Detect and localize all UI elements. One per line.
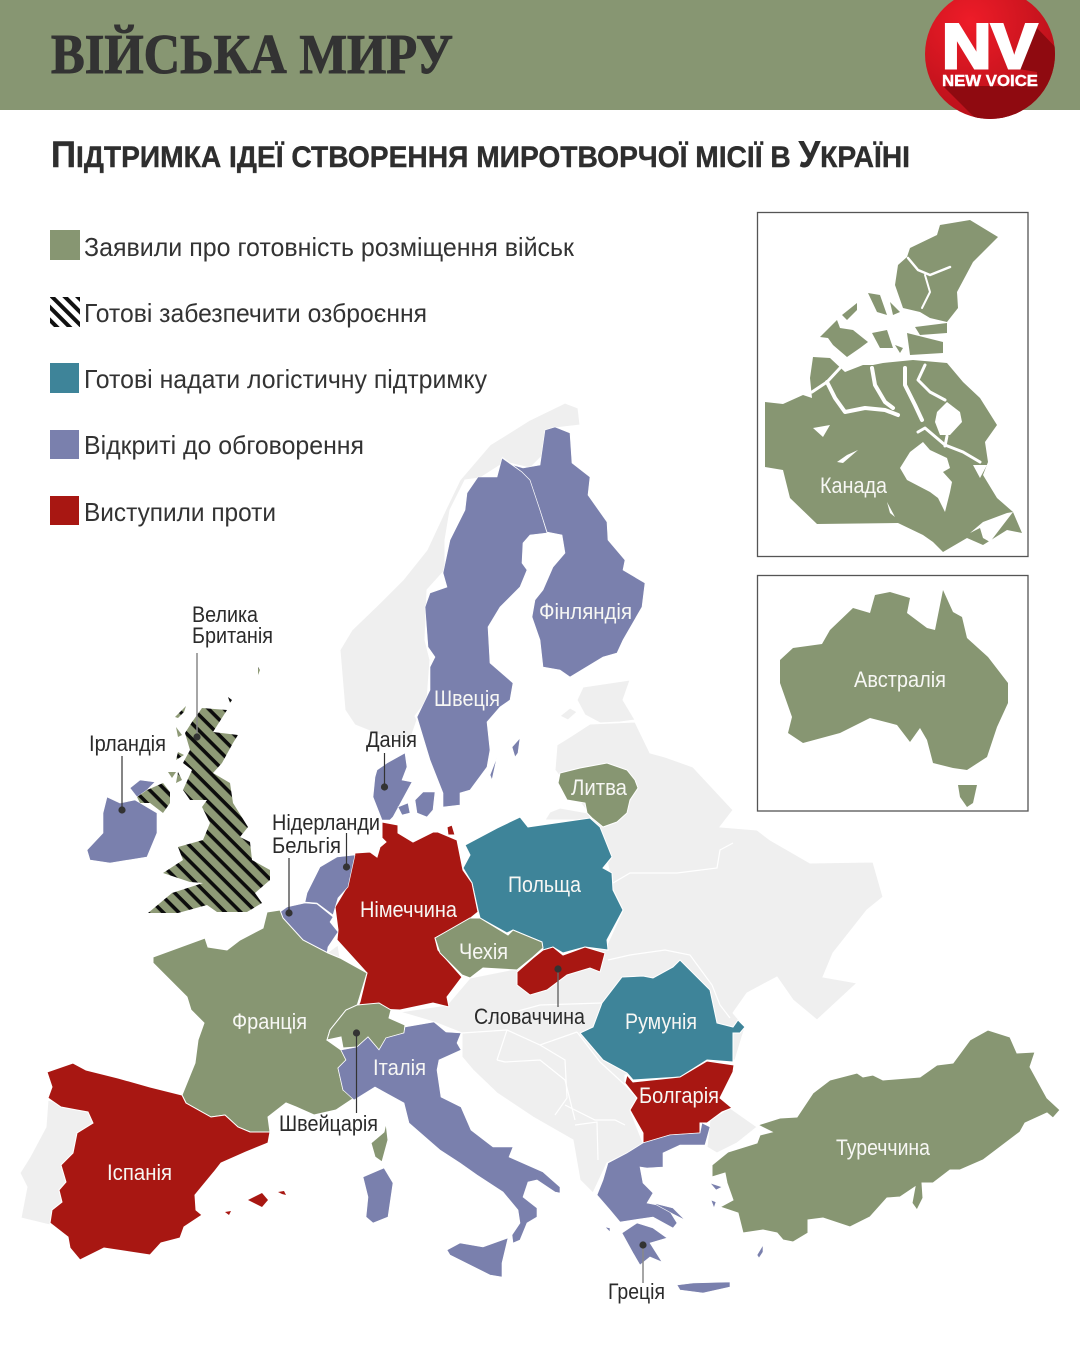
- callout: Switzerland: [279, 1029, 378, 1136]
- callout: Great Britain: Британія: [192, 623, 273, 648]
- country labels on map: Туреччина: [836, 1135, 931, 1160]
- neutral countries (grey): [20, 403, 883, 1225]
- Spain: [47, 1063, 286, 1260]
- logo: NV New Voice: [925, 0, 1055, 119]
- country labels on map: Італія: [373, 1055, 426, 1080]
- callout: Belgium: [272, 833, 341, 917]
- callout: Greece: Греція: [608, 1279, 665, 1304]
- header band: [0, 0, 1080, 110]
- country labels on map: Болгарія: [639, 1083, 719, 1108]
- callout: Slovakia: [474, 965, 586, 1029]
- Ireland: [87, 780, 157, 863]
- Italy: [338, 1022, 560, 1277]
- callout: Slovakia: Словаччина: [474, 1004, 586, 1029]
- legend item: opposed: Виступили проти: [84, 497, 276, 527]
- legend item: weapons: Готові забезпечити озброєння: [84, 298, 427, 328]
- Switzerland: [327, 1003, 405, 1050]
- Turkey: [712, 1030, 1060, 1242]
- Belgium: [280, 903, 338, 953]
- country labels on map: [107, 599, 931, 1185]
- country labels on map: Фінляндія: [539, 599, 632, 624]
- Germany: [335, 822, 478, 1010]
- Poland: [463, 817, 623, 953]
- logo: NV New Voice: NEW VOICE: [942, 73, 1038, 90]
- callout: Switzerland: Швейцарія: [279, 1111, 378, 1136]
- country labels on map: Німеччина: [360, 897, 458, 922]
- Denmark: [373, 753, 435, 820]
- Lithuania: [558, 763, 638, 827]
- legend item: open to discussion: Відкриті до обговорення: [84, 430, 364, 460]
- Swedish islands: [490, 738, 520, 780]
- France: [153, 910, 388, 1162]
- Sweden: [417, 458, 547, 807]
- callout: Netherlands: Нідерланди: [272, 810, 380, 835]
- legend item: logistics: Готові надати логістичну підтримку: [84, 364, 487, 394]
- Bulgaria: [625, 1061, 734, 1143]
- subtitle: ПІДТРИМКА ІДЕЇ СТВОРЕННЯ МИРОТВОРЧОЇ МІСІЇ В УКРАЇНІ: [51, 134, 910, 175]
- country labels on map: Польща: [508, 872, 582, 897]
- callout: Great Britain: [192, 602, 273, 741]
- country labels on map: Іспанія: [107, 1160, 172, 1185]
- Romania: [580, 960, 745, 1080]
- country labels on map: Литва: [571, 775, 628, 800]
- callout: Greece: [608, 1241, 665, 1304]
- callout: Denmark: [366, 727, 417, 791]
- map of Europe: [20, 403, 1060, 1304]
- inset: Canada: [758, 212, 1028, 556]
- country labels on map: Швеція: [434, 686, 500, 711]
- inset: Australia: [758, 576, 1028, 811]
- Czechia: [435, 918, 543, 978]
- Netherlands: [305, 855, 355, 915]
- Finland: [502, 427, 645, 677]
- country labels on map: Чехія: [459, 939, 508, 964]
- callout: Great Britain: Велика: [192, 602, 259, 627]
- inset: Canada: Канада: [820, 473, 888, 498]
- callout: Ireland: Ірландія: [89, 731, 166, 756]
- title: ВІЙСЬКА МИРУ: [51, 24, 453, 86]
- callout: Netherlands: [272, 810, 380, 871]
- callout: Denmark: Данія: [366, 727, 417, 752]
- callout: Ireland: [89, 731, 166, 814]
- legend: [50, 230, 575, 527]
- United Kingdom (hatched): [137, 667, 270, 913]
- Greece: [597, 1123, 763, 1293]
- country labels on map: Румунія: [625, 1009, 697, 1034]
- Slovakia: [517, 947, 605, 995]
- legend item: troops: Заявили про готовність розміщення військ: [84, 232, 575, 262]
- inset: Australia: Австралія: [854, 667, 946, 692]
- logo: NV New Voice: NV: [942, 12, 1037, 82]
- country labels on map: Франція: [232, 1009, 307, 1034]
- callout: Belgium: Бельгія: [272, 833, 341, 858]
